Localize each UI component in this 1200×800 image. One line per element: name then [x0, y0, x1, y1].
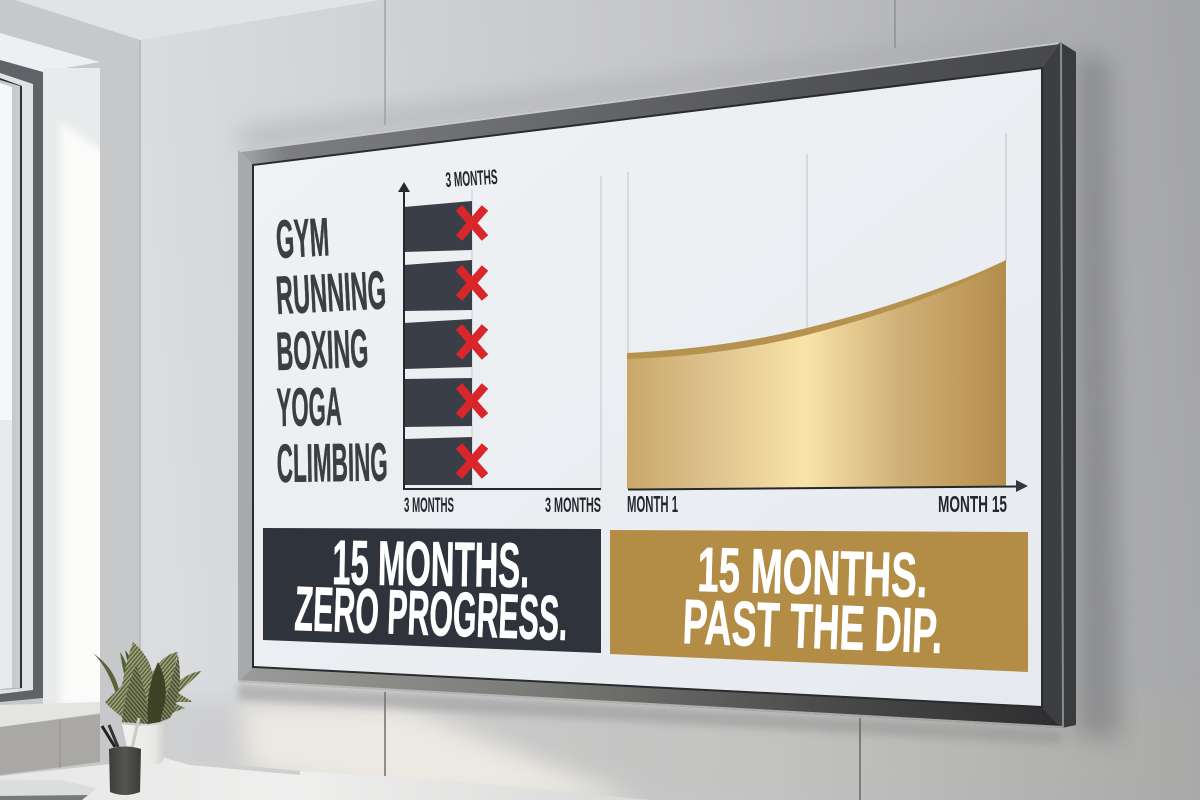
- wall-mounted frame: [238, 42, 1076, 728]
- activity labels: YOGA: [276, 377, 342, 438]
- activity labels: [274, 207, 388, 494]
- gold banner: past the dip: [610, 530, 1028, 672]
- activity labels: GYM: [274, 207, 331, 270]
- axes: [398, 182, 601, 490]
- activity labels: BOXING: [275, 319, 369, 382]
- left bar chart: abandoned activities: [398, 166, 601, 517]
- screen panel: [253, 68, 1042, 707]
- dark banner: zero progress: 15 MONTHS.: [332, 528, 530, 601]
- icon: pen cup: [102, 718, 141, 795]
- month labels: MONTH 15: [938, 491, 1007, 517]
- desk: [0, 758, 650, 800]
- axis labels: [404, 166, 601, 517]
- month labels: [627, 491, 1007, 517]
- red x marks: [459, 208, 485, 476]
- gold banner: past the dip: 15 MONTHS.: [697, 535, 928, 611]
- month labels: MONTH 1: [627, 491, 678, 517]
- gold growth curve band: [627, 260, 1006, 489]
- axis labels: 3 MONTHS: [404, 494, 454, 517]
- icon: potted plant: [93, 642, 202, 766]
- x axis arrow: [628, 480, 1028, 492]
- gold banner: past the dip: PAST THE DIP.: [681, 587, 944, 667]
- window: [0, 33, 110, 775]
- dark banner: zero progress: [263, 528, 601, 654]
- dark banner: zero progress: ZERO PROGRESS.: [293, 574, 569, 654]
- icon: laptop: [0, 780, 96, 800]
- axis labels: 3 MONTHS: [445, 166, 498, 192]
- text: RUNNING: [274, 260, 387, 326]
- bars: [404, 201, 472, 485]
- right area chart: 15 months growth: [627, 133, 1028, 517]
- gold area fill: [627, 262, 1006, 489]
- axis labels: 3 MONTHS: [545, 494, 601, 517]
- text: CLIMBING: [276, 432, 388, 494]
